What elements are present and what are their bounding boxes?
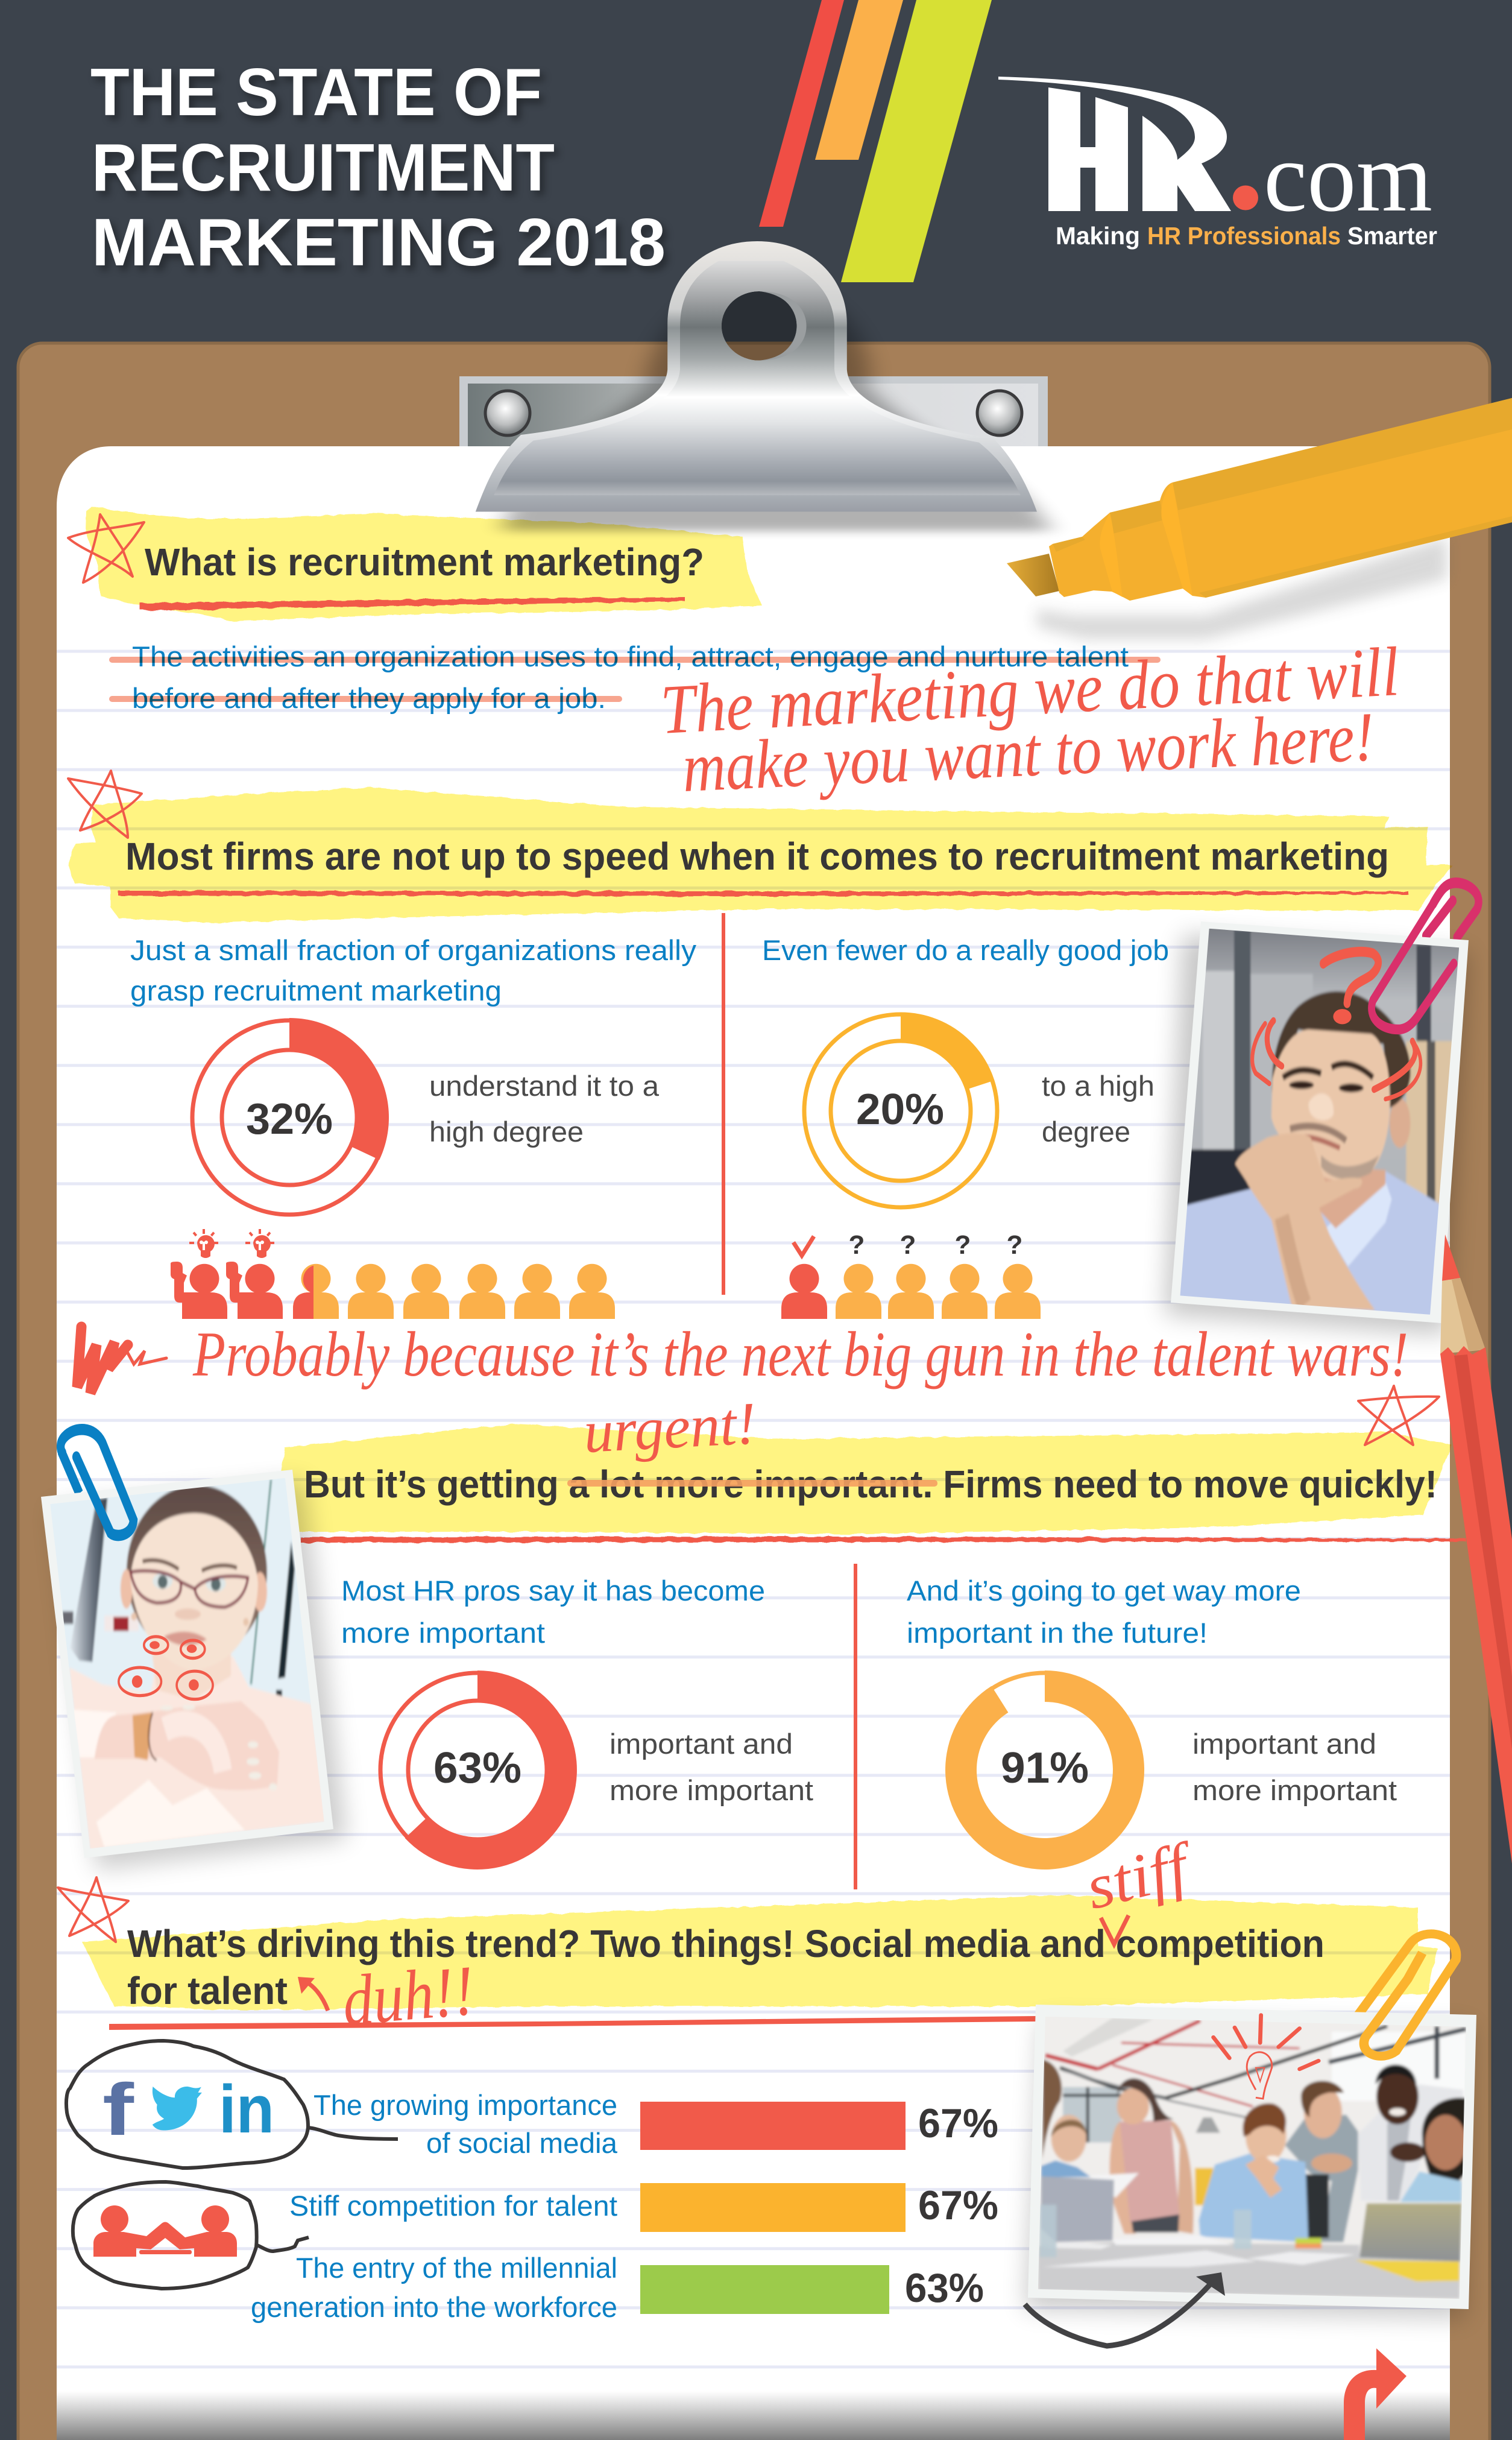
bar row: social media: of social media bbox=[426, 2127, 618, 2159]
left column heading: Most HR pros say it has become bbox=[341, 1575, 765, 1607]
bar row: millennials: generation into the workforce bbox=[251, 2291, 617, 2323]
donut chart: 91%: 91% bbox=[1001, 1744, 1089, 1792]
heading: Most firms are not up to speed when it comes to recruitment marketing bbox=[125, 835, 1389, 878]
photo shadow bbox=[1025, 2020, 1471, 2319]
question marks: ? bbox=[955, 1230, 971, 1260]
strikethrough marks bbox=[109, 657, 1161, 702]
bar row: millennials: The entry of the millennial bbox=[296, 2252, 617, 2284]
right column heading bbox=[907, 1575, 1301, 1649]
bar row: millennials bbox=[251, 2252, 984, 2323]
handwritten duh with arrow bbox=[298, 1950, 477, 2041]
marker body bbox=[1049, 398, 1512, 601]
right column heading: And it’s going to get way more bbox=[907, 1575, 1301, 1607]
icon: facebook: f bbox=[102, 2069, 134, 2151]
logo tagline: Making bbox=[1056, 222, 1140, 250]
handwritten stiff with caret: stiff bbox=[1079, 1829, 1202, 1923]
left column heading: more important bbox=[341, 1617, 545, 1649]
91% label: more important bbox=[1192, 1774, 1397, 1806]
photo shadow bbox=[1165, 935, 1469, 1335]
yellow highlight bbox=[280, 1424, 1452, 1534]
paperclip front bbox=[61, 1429, 134, 1535]
left column heading: grasp recruitment marketing bbox=[130, 975, 502, 1007]
question marks: ? bbox=[849, 1230, 865, 1260]
paperclip back bbox=[1358, 1943, 1422, 2015]
windows bbox=[1063, 2087, 1121, 2143]
marker tip bbox=[1007, 554, 1059, 596]
section: what's driving this trend bbox=[58, 1829, 1437, 2323]
arm and hand bbox=[95, 1701, 279, 1790]
20% label: degree bbox=[1042, 1116, 1130, 1148]
donut chart: 63% bbox=[380, 1670, 577, 1870]
clip base plate bbox=[459, 376, 1048, 446]
section: getting more important bbox=[280, 1386, 1466, 1889]
metal clip bbox=[476, 241, 1051, 531]
lamp bbox=[1196, 2117, 1220, 2133]
title: RECRUITMENT bbox=[92, 130, 555, 205]
pencil wood bbox=[1440, 1278, 1485, 1354]
donut chart: 63%: 63% bbox=[433, 1744, 521, 1792]
donut chart: 32%: 32% bbox=[246, 1095, 333, 1143]
check mark bbox=[793, 1236, 814, 1256]
nose and lips bbox=[175, 1608, 201, 1620]
paper sheet bbox=[57, 446, 1450, 2440]
63% label bbox=[610, 1728, 813, 1806]
definition text: before and after they apply for a job. bbox=[132, 682, 606, 714]
marker top shade bbox=[1173, 398, 1512, 510]
icon group: competition bbox=[73, 2182, 309, 2289]
handwritten note bbox=[659, 633, 1401, 807]
left column heading: Just a small fraction of organizations really bbox=[130, 934, 697, 966]
ears bbox=[121, 1569, 133, 1608]
20% label bbox=[1042, 1070, 1154, 1148]
logo: HR.com bbox=[998, 77, 1437, 250]
glasses bbox=[131, 1571, 248, 1607]
marker bottom stripe bbox=[1199, 516, 1512, 598]
icon group: social media bbox=[66, 2041, 398, 2168]
photo shadow bbox=[53, 1481, 347, 1870]
pencil body bbox=[1440, 1346, 1512, 1863]
hair bbox=[127, 1485, 267, 1659]
marker collars bbox=[1161, 482, 1192, 596]
folder bbox=[1355, 2260, 1460, 2281]
red question mark bbox=[1252, 952, 1420, 1099]
donut chart: 32% bbox=[192, 1018, 389, 1215]
left laptop bbox=[1041, 2176, 1114, 2242]
pen scribble bbox=[77, 1327, 166, 1393]
red circled marks bbox=[119, 1637, 213, 1699]
paperclip front bbox=[1364, 1934, 1457, 2056]
ruled lines bbox=[57, 650, 1450, 2373]
paperclip back bbox=[61, 1452, 80, 1493]
callout tail bbox=[308, 2128, 398, 2139]
handwritten duh with arrow: duh!! bbox=[339, 1950, 477, 2041]
icon: arm wrestling figures bbox=[93, 2205, 237, 2257]
bar row: social media bbox=[313, 2089, 998, 2159]
marker shadow bbox=[1037, 537, 1447, 639]
logo mark H letterform bbox=[1048, 87, 1128, 211]
photo content bbox=[1180, 901, 1459, 1315]
heading: What is recruitment marketing? bbox=[145, 540, 704, 584]
red underline bbox=[118, 891, 1408, 896]
32% label: high degree bbox=[429, 1116, 584, 1148]
photo content bbox=[1025, 1934, 1493, 2312]
handwritten note: The marketing we do that will bbox=[659, 633, 1401, 749]
paperclip back bbox=[1426, 883, 1479, 937]
bar row: competition bbox=[289, 2182, 998, 2232]
paperclip front bbox=[1372, 903, 1454, 1029]
heading: But it’s getting a lot more important. Firms need to move quickly! bbox=[304, 1462, 1437, 1506]
bar row: social media: The growing importance bbox=[313, 2089, 617, 2121]
red lightbulb doodle bbox=[1214, 2015, 1318, 2099]
neck bbox=[1317, 1167, 1385, 1228]
red underline bbox=[109, 2016, 1037, 2030]
logo .com wordmark: com bbox=[1264, 121, 1432, 232]
paper in hand bbox=[1089, 2173, 1139, 2198]
photo: team around a table bbox=[1025, 1934, 1493, 2346]
star doodle bbox=[58, 1877, 128, 1942]
brows bbox=[142, 1560, 237, 1570]
bar row: social media: 67% bbox=[918, 2100, 998, 2146]
rivet left bbox=[485, 391, 530, 435]
yellow boxes bbox=[1195, 2168, 1213, 2205]
table bbox=[1038, 2242, 1460, 2299]
32% label bbox=[429, 1070, 660, 1148]
star doodle bbox=[68, 771, 142, 838]
papers bbox=[1042, 2251, 1256, 2267]
hair bbox=[1272, 991, 1411, 1108]
face bbox=[1271, 1029, 1390, 1181]
pipes bbox=[1098, 2021, 1200, 2069]
91% label: important and bbox=[1192, 1728, 1376, 1760]
title bbox=[90, 55, 666, 280]
handwritten note: talent wars bbox=[77, 1319, 1408, 1393]
20% label: to a high bbox=[1042, 1070, 1154, 1102]
column divider bbox=[854, 1564, 857, 1889]
left column heading bbox=[341, 1575, 765, 1649]
handwritten urgent: urgent! bbox=[582, 1389, 758, 1465]
curved arrow bbox=[1025, 2272, 1225, 2346]
right column heading: Even fewer do a really good job bbox=[762, 934, 1169, 966]
yellow highlight bbox=[86, 506, 762, 621]
black man bbox=[1358, 2084, 1463, 2202]
hand drawn circle bbox=[66, 2041, 308, 2168]
red underline bbox=[140, 597, 685, 610]
question marks: ? bbox=[900, 1230, 916, 1260]
pencil bbox=[1440, 1234, 1512, 1863]
hand and arm bbox=[1235, 1133, 1375, 1310]
handwritten note: make you want to work here! bbox=[681, 698, 1376, 807]
91% label bbox=[1192, 1728, 1397, 1806]
question marks: ? bbox=[1007, 1230, 1022, 1260]
section: what is recruitment marketing bbox=[68, 506, 1401, 807]
glasses bbox=[1234, 2210, 1252, 2249]
star doodle bbox=[1358, 1386, 1439, 1445]
logo tagline bbox=[1056, 222, 1437, 250]
right woman bbox=[1422, 2097, 1466, 2202]
heading bbox=[127, 1922, 1325, 2012]
logo red dot bbox=[1233, 186, 1258, 210]
center man bbox=[1199, 2154, 1308, 2242]
yellow highlight bbox=[82, 1895, 1437, 2010]
32% label: understand it to a bbox=[429, 1070, 660, 1102]
donut chart: 91% bbox=[945, 1670, 1144, 1870]
paper bottom shadow bbox=[57, 2391, 1450, 2440]
title: MARKETING 2018 bbox=[92, 205, 666, 280]
yellow highlight bbox=[68, 788, 1452, 923]
column divider bbox=[722, 913, 725, 1295]
woman far left hair bbox=[1042, 2059, 1062, 2159]
heading: for talent bbox=[127, 1969, 288, 2012]
photo frame bbox=[1171, 921, 1469, 1323]
logo tagline: Smarter bbox=[1347, 222, 1437, 250]
left column heading bbox=[130, 934, 697, 1007]
logo mark R letterform with swoosh bbox=[998, 77, 1231, 211]
logo tagline: HR Professionals bbox=[1147, 222, 1341, 250]
strikethrough bbox=[567, 1480, 937, 1487]
people icons: doing a good job bbox=[781, 1230, 1041, 1319]
bar row: competition: 67% bbox=[918, 2182, 998, 2228]
donut chart: 20% bbox=[804, 1013, 997, 1207]
callout tail bbox=[257, 2237, 309, 2251]
photo content bbox=[36, 1429, 338, 1859]
neck bbox=[151, 1642, 231, 1700]
blouse bbox=[69, 1656, 326, 1850]
face bbox=[131, 1513, 258, 1670]
63% label: more important bbox=[610, 1774, 813, 1806]
people icons: understanding bbox=[171, 1229, 615, 1319]
red underline bbox=[301, 1537, 1466, 1543]
star doodle bbox=[68, 514, 144, 583]
brows and eyes bbox=[1283, 1064, 1373, 1078]
handwritten stiff with caret bbox=[1079, 1829, 1202, 1944]
heading: What’s driving this trend? Two things! Social media and competition bbox=[127, 1922, 1325, 1965]
nails bbox=[160, 1705, 277, 1790]
standing woman bbox=[1109, 2122, 1136, 2234]
bar row: millennials: 63% bbox=[905, 2265, 984, 2311]
photo: woman checking watch bbox=[36, 1429, 347, 1870]
photo frame bbox=[1028, 2005, 1476, 2309]
right laptop bbox=[1359, 2204, 1462, 2261]
red turn arrow bbox=[1344, 2348, 1406, 2440]
title: THE STATE OF bbox=[90, 55, 542, 130]
highlighter marker bbox=[1007, 398, 1512, 639]
63% label: important and bbox=[610, 1728, 793, 1760]
bracelet bbox=[133, 1713, 151, 1760]
photo: puzzled man bbox=[1164, 883, 1479, 1335]
hand drawn circle bbox=[73, 2182, 257, 2289]
definition text: The activities an organization uses to find, attract, engage and nurture talent bbox=[132, 640, 1129, 672]
lightbulb icons bbox=[189, 1229, 274, 1258]
earrings bbox=[131, 1613, 137, 1620]
question marks bbox=[849, 1230, 1022, 1260]
photo frame bbox=[41, 1470, 333, 1858]
icon: linkedin: in bbox=[219, 2072, 274, 2147]
right column heading: important in the future! bbox=[907, 1617, 1208, 1649]
pencil lead bbox=[1442, 1234, 1460, 1281]
donut chart: 20%: 20% bbox=[856, 1086, 944, 1134]
sticky notes bbox=[1295, 2238, 1321, 2244]
seated woman bbox=[1051, 2115, 1086, 2162]
section: most firms not up to speed bbox=[68, 771, 1452, 1319]
icon: twitter bbox=[153, 2087, 202, 2131]
definition text bbox=[132, 640, 1129, 714]
bar row: competition: Stiff competition for talent bbox=[289, 2190, 617, 2222]
rivet right bbox=[977, 391, 1022, 435]
eyes bbox=[153, 1573, 172, 1589]
colored stripes bbox=[759, 0, 992, 282]
ear bbox=[1390, 1098, 1410, 1148]
standing man bbox=[1285, 2115, 1358, 2242]
shirt bbox=[1176, 1170, 1441, 1319]
